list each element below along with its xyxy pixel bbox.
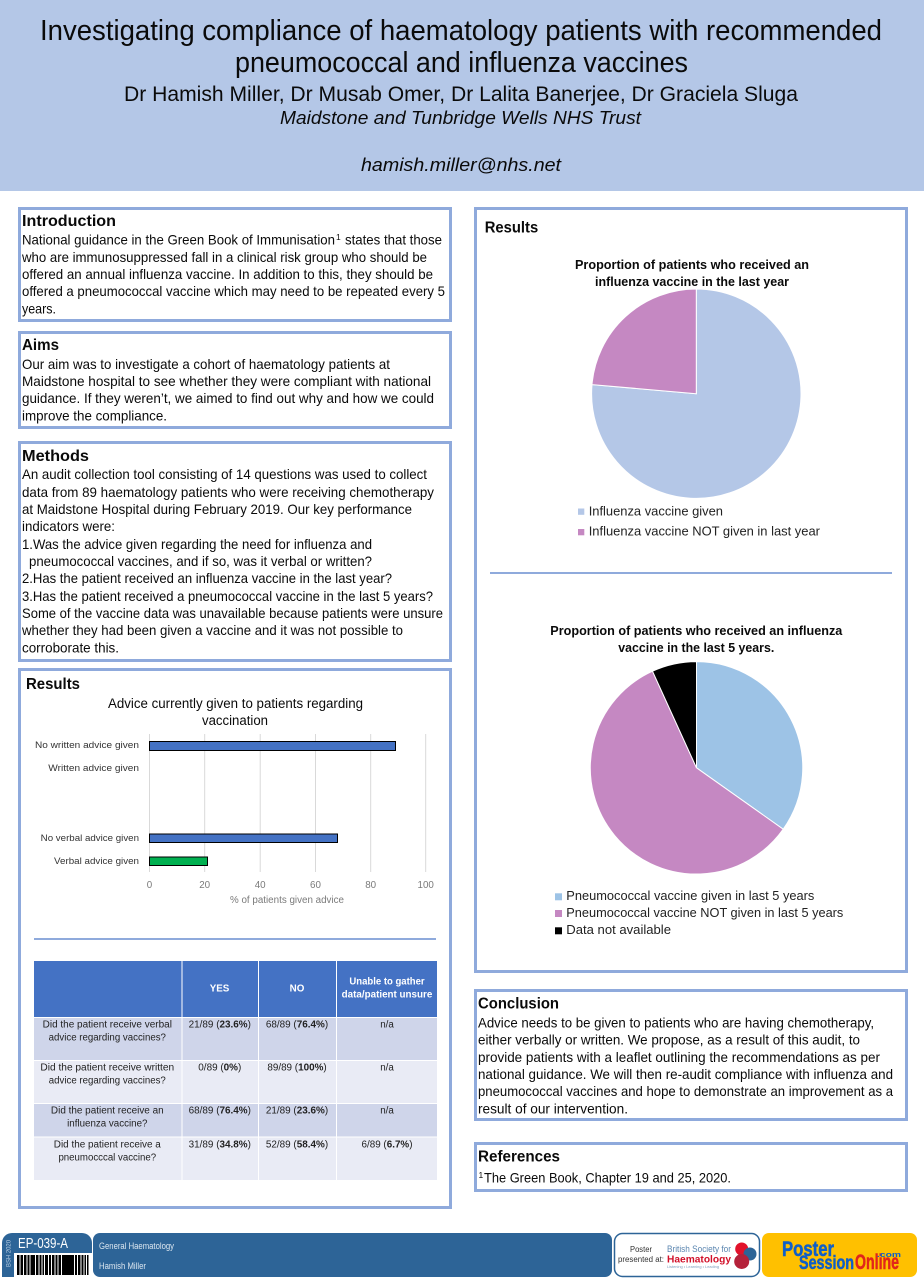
text block: methods: 1.Was the advice given regarding the need for influenza and bbox=[22, 537, 372, 552]
text block: aims: Our aim was to investigate a cohort of haematology patients at bbox=[22, 357, 390, 372]
x axis title: % of patients given advice bbox=[230, 895, 345, 906]
heading: aims: Aims bbox=[22, 337, 59, 354]
pie chart: influenza vaccine bbox=[592, 289, 801, 498]
table header row: Unable to gather bbox=[349, 977, 425, 988]
table row: written advice bbox=[40, 1063, 394, 1087]
BSH wordmark bbox=[667, 1244, 731, 1269]
chart title: influenza pie: Proportion of patients who received an bbox=[575, 258, 809, 272]
text block: methods: indicators were: bbox=[22, 519, 115, 534]
text block: methods: data from 89 haematology patients who were receiving chemotherapy bbox=[22, 485, 434, 500]
text block: reference: The Green Book, Chapter 19 and 25, 2020. bbox=[484, 1171, 731, 1186]
icon: BSH circles bbox=[734, 1242, 756, 1269]
text block: methods: 2.Has the patient received an influenza vaccine in the last year? bbox=[22, 571, 392, 586]
heading: references: References bbox=[478, 1149, 560, 1166]
text block: introduction: states that those bbox=[345, 232, 442, 248]
text block: conclusion: Advice needs to be given to patients who are having chemotherapy, bbox=[478, 1015, 874, 1030]
table row: verbal advice bbox=[43, 1020, 394, 1044]
text block: conclusion: either verbally or written. We propose, as a result of this audit, to bbox=[478, 1032, 860, 1048]
table row: written advice: 0/89 (0%) bbox=[198, 1063, 241, 1074]
legend: pneumococcal pie: Pneumococcal vaccine given in last 5 years bbox=[566, 888, 815, 903]
heading: introduction: Introduction bbox=[22, 213, 116, 230]
table row: written advice: advice regarding vaccines? bbox=[49, 1076, 166, 1087]
header banner bbox=[0, 0, 924, 191]
bar: no verbal advice bbox=[150, 834, 338, 842]
x axis labels: 20 bbox=[199, 880, 211, 891]
category labels: No verbal advice given bbox=[41, 833, 139, 844]
bar chart: advice given bbox=[35, 696, 434, 906]
text block: introduction: years. bbox=[22, 302, 56, 316]
x axis labels bbox=[147, 880, 434, 891]
chart title: influenza pie bbox=[575, 258, 809, 289]
table row: pneumococcal vaccine: Did the patient receive a bbox=[54, 1140, 161, 1151]
table row: written advice: 89/89 (100%) bbox=[267, 1063, 327, 1074]
chart title: vaccination bbox=[202, 713, 268, 728]
text block: conclusion: national guidance. We will then re-audit compliance with influenza and bbox=[478, 1067, 893, 1082]
x axis labels: 40 bbox=[255, 880, 266, 891]
contact email: hamish.miller@nhs.net bbox=[361, 154, 562, 175]
chart title: pneumococcal pie bbox=[550, 624, 843, 655]
BSH wordmark: British Society for bbox=[667, 1244, 731, 1254]
panel: results right bbox=[476, 208, 906, 972]
panel: results left bbox=[20, 670, 450, 1208]
table header row bbox=[210, 977, 433, 1001]
chart title: Advice currently given to patients regarding bbox=[108, 696, 363, 711]
table row: verbal advice: 21/89 (23.6%) bbox=[189, 1020, 251, 1031]
table row: influenza vaccine: n/a bbox=[380, 1106, 394, 1117]
table row: influenza vaccine: 68/89 (76.4%) bbox=[189, 1106, 251, 1117]
title: Investigating compliance of haematology patients with recommended bbox=[40, 15, 882, 47]
title: pneumococcal and influenza vaccines bbox=[235, 47, 688, 79]
footer: PosterSessionOnline logo bbox=[762, 1233, 917, 1277]
panel: conclusion bbox=[476, 990, 906, 1120]
table row: verbal advice: 68/89 (76.4%) bbox=[266, 1020, 328, 1031]
table row: verbal advice: n/a bbox=[380, 1020, 394, 1031]
topic: General Haematology bbox=[99, 1241, 175, 1251]
BSH wordmark: Listening • Learning • Leading bbox=[667, 1265, 719, 1269]
institution: Maidstone and Tunbridge Wells NHS Trust bbox=[280, 107, 642, 128]
legend: influenza pie bbox=[578, 504, 821, 539]
table row: influenza vaccine bbox=[51, 1106, 394, 1130]
text block: methods: 3.Has the patient received a pneumococcal vaccine in the last 5 years? bbox=[22, 589, 433, 604]
text block: introduction bbox=[21, 232, 445, 316]
x axis labels: 100 bbox=[418, 880, 434, 891]
category labels: No written advice given bbox=[35, 740, 139, 751]
authors: Dr Hamish Miller, Dr Musab Omer, Dr Lalita Banerjee, Dr Graciela Sluga bbox=[124, 83, 798, 106]
panel: aims bbox=[20, 332, 450, 428]
legend: pneumococcal pie: Pneumococcal vaccine NOT given in last 5 years bbox=[566, 905, 844, 920]
footer: BSH logo box bbox=[614, 1234, 760, 1276]
table row: influenza vaccine: influenza vaccine? bbox=[67, 1119, 148, 1130]
table row: influenza vaccine: Did the patient receive an bbox=[51, 1106, 164, 1117]
table row: influenza vaccine: 21/89 (23.6%) bbox=[266, 1106, 328, 1117]
table row: pneumococcal vaccine: 31/89 (34.8%) bbox=[189, 1140, 251, 1151]
legend: pneumococcal pie bbox=[555, 888, 844, 937]
text block: aims: guidance. If they weren’t, we aimed to find out why and how we could bbox=[22, 391, 434, 406]
text block: conclusion: provide patients with a leaflet outlining the recommendations as per bbox=[478, 1050, 880, 1065]
heading: methods: Methods bbox=[22, 448, 89, 465]
presented at label: Poster bbox=[630, 1245, 652, 1254]
text block: conclusion: pneumococcal vaccines and hope to demonstrate an improvement as a bbox=[478, 1084, 893, 1099]
text block: methods: whether they had been given a vaccine and it was not possible to bbox=[21, 623, 403, 638]
text block: conclusion bbox=[478, 1015, 893, 1116]
table row: pneumococcal vaccine bbox=[54, 1140, 412, 1164]
footer: PosterSessionOnline logo: Session bbox=[799, 1253, 854, 1274]
panel: references bbox=[476, 1144, 906, 1190]
text block: introduction: who are immunosuppressed fall in a clinical risk group who should be bbox=[21, 250, 427, 265]
x axis labels: 60 bbox=[310, 880, 321, 891]
heading: results: Results bbox=[26, 676, 80, 693]
panel: methods bbox=[20, 442, 450, 660]
table row: pneumococcal vaccine: 6/89 (6.7%) bbox=[362, 1140, 412, 1151]
x axis labels: 0 bbox=[147, 880, 153, 891]
footer: PosterSessionOnline logo: Online bbox=[855, 1251, 899, 1274]
bar: no written advice bbox=[150, 742, 396, 750]
bar: verbal advice bbox=[150, 857, 208, 866]
barcode bbox=[17, 1255, 88, 1275]
table row: verbal advice: Did the patient receive verbal bbox=[43, 1020, 172, 1031]
text block: conclusion: result of our intervention. bbox=[478, 1102, 628, 1116]
legend: influenza pie: Influenza vaccine NOT given in last year bbox=[589, 524, 821, 539]
panel: introduction bbox=[20, 208, 450, 320]
presented at label: presented at: bbox=[618, 1255, 664, 1264]
table row: verbal advice: advice regarding vaccines? bbox=[49, 1033, 166, 1044]
table header row: data/patient unsure bbox=[342, 990, 433, 1001]
text block: introduction: 1 bbox=[336, 232, 341, 242]
legend: influenza pie: Influenza vaccine given bbox=[589, 504, 723, 519]
text block: methods: corroborate this. bbox=[22, 640, 119, 656]
chart title: influenza pie: influenza vaccine in the last year bbox=[595, 275, 789, 289]
chart title bbox=[108, 696, 363, 728]
poster id: EP-039-A bbox=[18, 1236, 68, 1252]
text block: aims: Maidstone hospital to see whether they were compliant with national bbox=[22, 374, 431, 389]
x axis labels: 80 bbox=[365, 880, 377, 891]
pie chart: pneumococcal vaccine bbox=[590, 662, 803, 874]
text block: aims: improve the compliance. bbox=[22, 408, 167, 424]
heading: results: Results bbox=[485, 220, 538, 237]
text block: methods: Some of the vaccine data was unavailable because patients were unsure bbox=[22, 606, 443, 621]
text block: introduction: National guidance in the Green Book of Immunisation bbox=[22, 232, 335, 248]
category labels bbox=[35, 740, 139, 867]
table header row: YES bbox=[210, 984, 230, 995]
text block: aims bbox=[22, 357, 434, 424]
text block: introduction: offered a pneumococcal vaccine which may need to be repeated every 5 bbox=[22, 284, 445, 299]
category labels: Written advice given bbox=[48, 763, 139, 774]
text block: methods bbox=[21, 467, 443, 656]
text block: introduction: offered an annual influenza vaccine. In addition to this, they should be bbox=[22, 267, 433, 282]
table header row: NO bbox=[290, 984, 305, 995]
footer: PosterSessionOnline logo: .com bbox=[877, 1250, 901, 1259]
table row: pneumococcal vaccine: 52/89 (58.4%) bbox=[266, 1140, 328, 1151]
table row: pneumococcal vaccine: pneumocccal vaccine? bbox=[58, 1153, 157, 1164]
legend: pneumococcal pie: Data not available bbox=[566, 922, 671, 937]
footer: poster id tab bbox=[2, 1233, 92, 1277]
table row: written advice: n/a bbox=[380, 1063, 394, 1074]
footer: PosterSessionOnline logo: Poster bbox=[782, 1238, 834, 1261]
chart title: pneumococcal pie: Proportion of patients who received an influenza bbox=[550, 624, 843, 638]
category labels: Verbal advice given bbox=[54, 856, 139, 867]
presented at label bbox=[618, 1245, 664, 1264]
BSH wordmark: Haematology bbox=[667, 1254, 731, 1266]
text block: methods: pneumococcal vaccines, and if so, was it verbal or written? bbox=[29, 554, 372, 569]
text block: methods: An audit collection tool consisting of 14 questions was used to collect bbox=[22, 467, 427, 482]
chart title: pneumococcal pie: vaccine in the last 5 years. bbox=[618, 641, 774, 655]
conference label: BSH 2020 bbox=[6, 1240, 12, 1267]
heading: conclusion: Conclusion bbox=[478, 995, 559, 1012]
text block: methods: at Maidstone Hospital during February 2019. Our key performance bbox=[22, 502, 412, 517]
footer: topic and author bar bbox=[93, 1233, 612, 1277]
text block: reference: 1 bbox=[478, 1170, 484, 1180]
table row: written advice: Did the patient receive written bbox=[40, 1063, 174, 1074]
presenter: Hamish Miller bbox=[99, 1261, 146, 1271]
title bbox=[40, 15, 882, 79]
table: audit results bbox=[34, 961, 437, 1180]
